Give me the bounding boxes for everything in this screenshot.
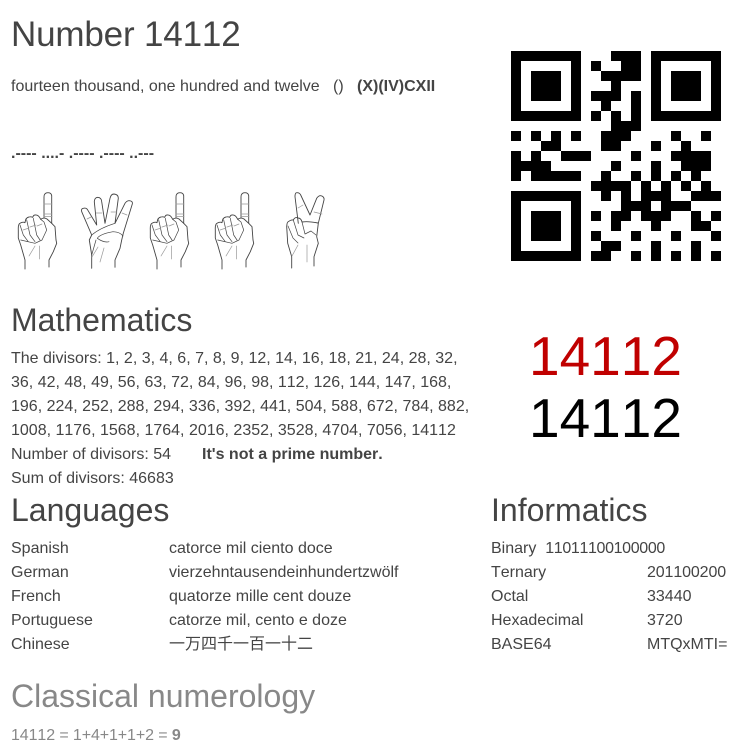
numerology sum: 14112 = 1+4+1+1+2 = 9 (11, 727, 181, 744)
heading: mathematics: Mathematics (11, 302, 192, 338)
languages table (11, 540, 398, 653)
divisors list: The divisors: 1, 2, 3, 4, 6, 7, 8, 9, 12, 14, 16, 18, 21, 24, 28, 32, (11, 350, 458, 367)
divisors list: 36, 42, 48, 49, 56, 63, 72, 84, 96, 98, 112, 126, 144, 147, 168, (11, 374, 451, 391)
informatics table: Binary 11011100100000 (491, 540, 665, 557)
hand: four (82, 194, 132, 268)
languages table: Portuguese (11, 612, 93, 629)
hand: two (287, 193, 324, 268)
number name in words: fourteen thousand, one hundred and twelve () (X)(IV)CXII (11, 78, 435, 95)
languages table: catorze mil, cento e doze (169, 612, 347, 629)
heading: informatics: Informatics (491, 492, 647, 528)
languages table: 一万四千一百一十二 (169, 636, 313, 653)
informatics table: Octal (491, 588, 528, 605)
prime status: It's not a prime number. (202, 446, 383, 463)
title: Number 14112 (11, 15, 240, 54)
sum of divisors: Sum of divisors: 46683 (11, 470, 174, 487)
heading: languages: Languages (11, 492, 169, 528)
languages table: quatorze mille cent douze (169, 588, 351, 605)
number of divisors: Number of divisors: 54 (11, 446, 171, 463)
divisors list: 196, 224, 252, 288, 294, 336, 392, 441, 504, 588, 672, 784, 882, (11, 398, 469, 415)
languages table: French (11, 588, 61, 605)
divisors list (11, 350, 469, 439)
red number: 14112 (529, 325, 682, 387)
informatics table (491, 540, 727, 653)
informatics table: 201100200 (647, 564, 726, 581)
divisors list: 1008, 1176, 1568, 1764, 2016, 2352, 3528, 4704, 7056, 14112 (11, 422, 456, 439)
QR code (511, 51, 721, 261)
black number: 14112 (529, 387, 682, 449)
informatics table: 33440 (647, 588, 692, 605)
informatics table: Ternary (491, 564, 546, 581)
languages table: Chinese (11, 636, 70, 653)
informatics table: 3720 (647, 612, 683, 629)
hand: one (18, 193, 57, 269)
informatics table: Hexadecimal (491, 612, 583, 629)
icon: sign language hands (18, 192, 324, 270)
morse code: .---- ....- .---- .---- ..--- (11, 145, 154, 162)
informatics table: MTQxMTI= (647, 636, 727, 653)
heading: classical numerology: Classical numerology (11, 678, 315, 714)
informatics table: BASE64 (491, 636, 551, 653)
languages table: German (11, 564, 69, 581)
languages table: catorce mil ciento doce (169, 540, 333, 557)
hand: one (150, 193, 189, 269)
languages table: Spanish (11, 540, 69, 557)
languages table: vierzehntausendeinhundertzwölf (169, 564, 398, 581)
hand: one (215, 193, 254, 269)
